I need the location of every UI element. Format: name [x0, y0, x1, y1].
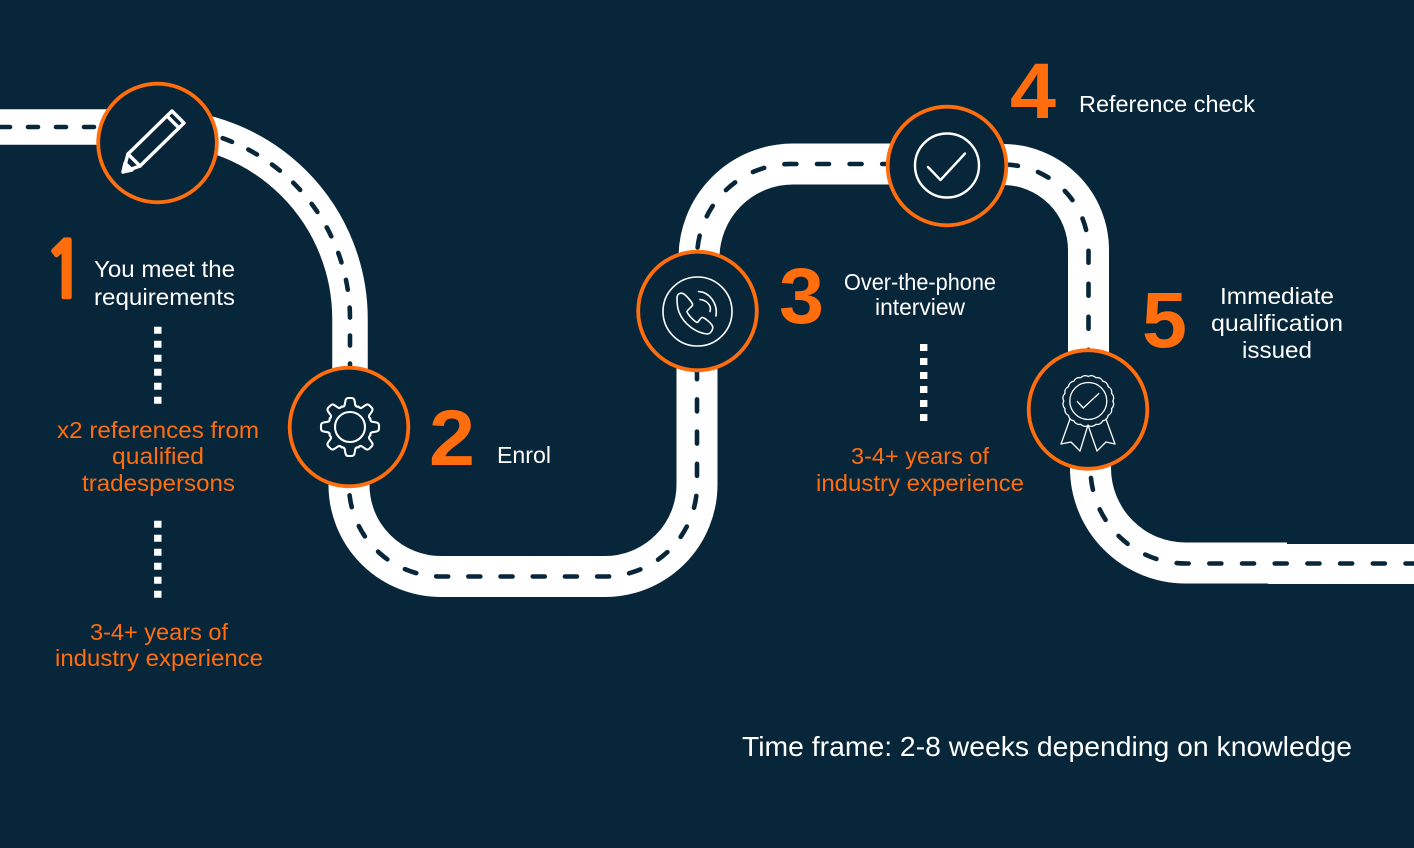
step 3 experience note	[816, 443, 1024, 496]
requirement: experience: 3-4+ years of	[90, 619, 228, 645]
step 1 number: 1	[43, 232, 87, 310]
dotted connector 2	[154, 521, 162, 598]
step 5 label: issued	[1242, 337, 1312, 363]
step 4 number: 4	[1010, 46, 1056, 135]
requirement: references: x2 references from	[57, 417, 259, 443]
winding road	[0, 127, 1414, 576]
step 5 label: qualification	[1211, 310, 1343, 336]
requirement: references	[57, 417, 259, 496]
step 3 marker: phone icon	[638, 252, 757, 370]
requirement: references: qualified	[112, 443, 204, 469]
step 2 label: Enrol	[497, 442, 551, 468]
step 2 number: 2	[429, 393, 475, 482]
requirement: experience	[55, 619, 263, 671]
step 5 marker: ribbon icon	[1029, 350, 1147, 469]
step 1 marker: pencil icon	[98, 84, 217, 202]
step 3 experience note: 3-4+ years of	[851, 443, 989, 469]
step 5 label	[1211, 283, 1343, 363]
step 3 experience note: industry experience	[816, 470, 1024, 496]
step 5 number: 5	[1142, 275, 1187, 364]
requirement: experience: industry experience	[55, 645, 263, 671]
step 3 number: 3	[779, 251, 824, 340]
step 4 marker: check icon	[888, 107, 1006, 225]
step 3 label: Over-the-phone	[844, 269, 996, 295]
step 3 label	[844, 269, 996, 320]
dotted connector 3	[920, 344, 927, 421]
dotted connector 1	[154, 327, 162, 404]
time frame note: Time frame: 2-8 weeks depending on knowledge	[742, 731, 1352, 762]
requirement: references: tradespersons	[82, 470, 235, 496]
step 2 marker: gear icon	[290, 368, 408, 486]
step 3 label: interview	[875, 294, 966, 320]
step 1 label: requirements	[94, 284, 235, 310]
step 5 label: Immediate	[1220, 283, 1334, 309]
step 1 label: You meet the	[94, 256, 235, 282]
step 1 label	[94, 256, 235, 310]
step 4 label: Reference check	[1079, 91, 1255, 117]
